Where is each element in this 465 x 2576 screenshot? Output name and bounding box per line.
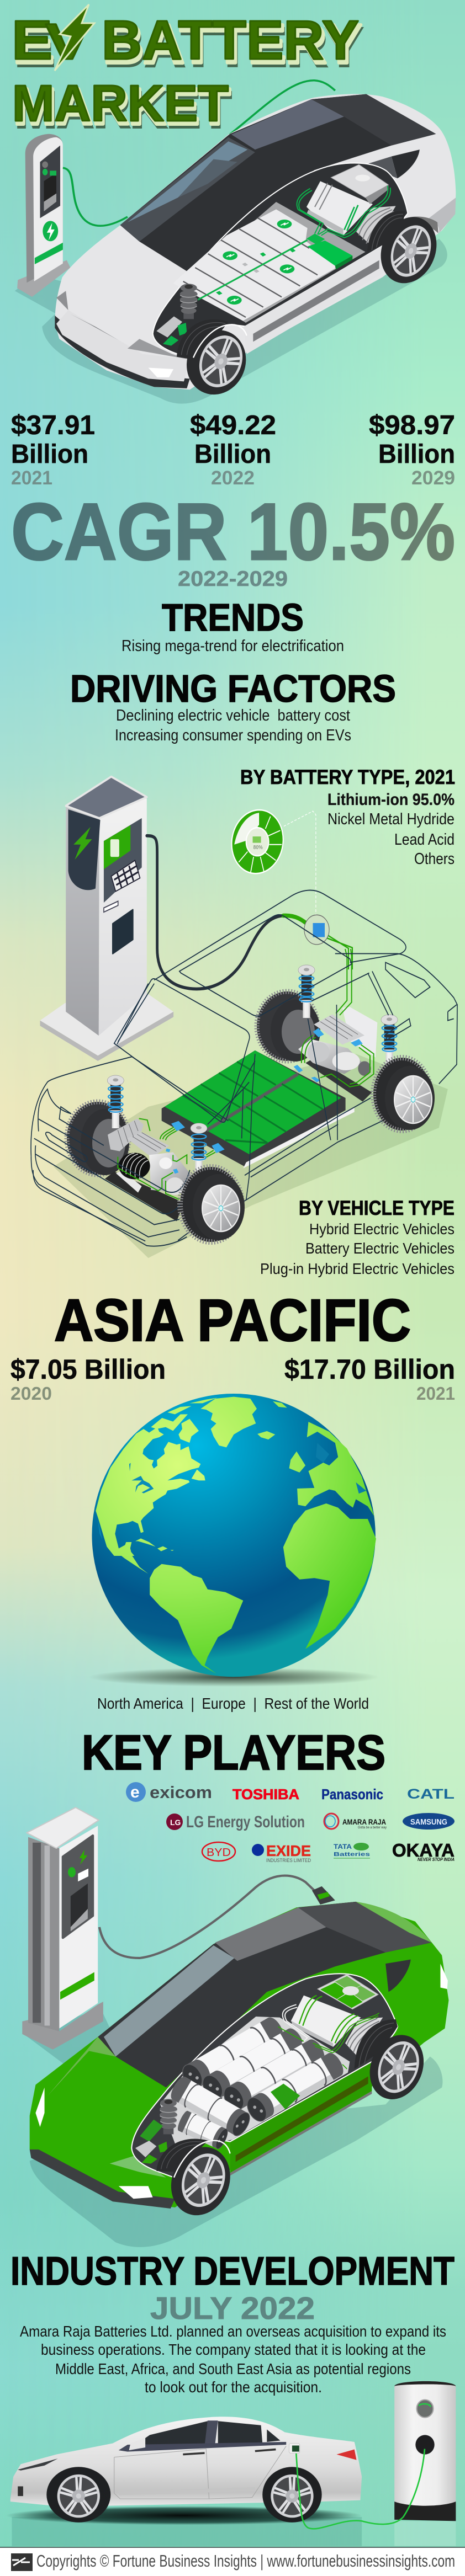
development body text <box>20 2323 446 2396</box>
regional heading: Asia Pacific: ASIA PACIFIC <box>54 1287 411 1353</box>
logo: Amara Raja <box>324 1814 387 1830</box>
title shadow and extrusion layers: BATTERY <box>104 17 363 78</box>
Asia Pacific 2020 value: 2020 <box>10 1383 52 1404</box>
globe inland seas <box>316 1443 366 1494</box>
2021 value <box>11 410 95 489</box>
logo: exicom: e <box>130 1783 140 1801</box>
charge state dial with callout line <box>222 799 316 920</box>
car 1 rear panels <box>365 150 456 239</box>
logo: Exide <box>252 1842 311 1863</box>
front wheel <box>156 2138 240 2224</box>
2022 value <box>190 410 276 489</box>
cutaway opening <box>153 163 408 358</box>
car 4: silver sedan charging at cylinder station <box>6 2381 456 2546</box>
wheel: near rear <box>373 1058 435 1130</box>
charge port <box>304 915 329 945</box>
trends text: Rising mega-trend for electrification <box>121 637 344 655</box>
footer logo <box>11 2553 33 2571</box>
title front letters <box>12 9 359 132</box>
sill <box>230 2062 372 2175</box>
logo: LG Energy Solution <box>166 1813 305 1831</box>
globe shadow <box>88 1667 379 1687</box>
driving factors text <box>115 707 351 744</box>
charge cable and wire outline <box>31 836 457 1246</box>
front wheel and tyre <box>177 319 256 403</box>
green battery tray <box>162 1050 355 1169</box>
footer bar <box>0 2547 465 2576</box>
globe body and eastern land <box>88 1394 379 1687</box>
far front wheel <box>67 1102 129 1175</box>
logo: Samsung: SAMSUNG <box>410 1817 447 1827</box>
title front letters: BATTERY <box>102 9 359 71</box>
title shadow and extrusion layers <box>14 17 363 138</box>
driving factors text: Increasing consumer spending on EVs <box>115 727 351 744</box>
battery tray walls <box>183 202 366 323</box>
electric motor <box>307 164 405 252</box>
logo: LG Energy Solution: LG <box>170 1818 181 1827</box>
wireframe car outline <box>31 890 457 1246</box>
title front letters: MARKET <box>12 74 229 132</box>
sedan wheel: rear <box>262 2467 322 2522</box>
sedan wheel: front <box>46 2467 110 2522</box>
logo: CATL: CATL <box>407 1786 455 1802</box>
green cell band <box>271 2084 300 2109</box>
rear wheel arch and tyre <box>371 209 446 292</box>
wheel: near front <box>180 1167 245 1242</box>
battery type segment <box>240 766 455 868</box>
car 1 cutaway interior <box>153 163 446 403</box>
car 3 ground shadow <box>24 2009 443 2247</box>
market size figures <box>11 410 455 489</box>
Asia Pacific 2021 value <box>284 1354 455 1404</box>
car 3 trim <box>30 1964 448 2209</box>
charger reflection <box>394 2521 456 2546</box>
land: north america and greenland <box>96 1397 257 1556</box>
sill panels <box>244 246 385 354</box>
Asia Pacific 2021 value: $17.70 Billion <box>284 1354 455 1385</box>
logo: exicom: exicom <box>150 1783 212 1802</box>
car 3 exterior <box>22 1807 448 2247</box>
logo: BYD <box>202 1842 235 1861</box>
logo: Amara Raja: AMARA RAJA <box>342 1817 386 1826</box>
2029 value: $98.97 <box>369 410 455 440</box>
green cables on motor <box>297 186 390 238</box>
green feed line to rear motor <box>326 934 352 969</box>
2021 value: Billion <box>11 440 88 469</box>
logo: Tata Green Batteries: TATA <box>334 1843 352 1850</box>
key players heading: KEY PLAYERS <box>82 1725 385 1780</box>
cell tray <box>160 2017 350 2148</box>
sedan reflection <box>12 2517 362 2546</box>
development body text: to look out for the acquisition. <box>145 2378 322 2396</box>
front suspension strut <box>180 284 198 319</box>
cylinder charger <box>394 2381 456 2521</box>
charger station 1 <box>17 134 70 297</box>
title shadow and extrusion layers: MARKET <box>15 81 231 138</box>
charger station 2 <box>40 777 173 1061</box>
electric motor with green lid <box>278 1974 398 2069</box>
sedan charge port <box>289 2443 300 2454</box>
logo: BYD: BYD <box>207 1847 231 1859</box>
2029 value <box>369 410 455 489</box>
front strut <box>160 2099 177 2134</box>
logo: Amara Raja: Gotta be a better way <box>358 1826 387 1830</box>
sedan lights <box>18 2450 356 2496</box>
charge state dial with callout line: 80% <box>253 844 263 850</box>
car 3 body <box>30 1902 448 2207</box>
Asia Pacific 2020 value <box>10 1354 166 1404</box>
car 1 exterior <box>15 81 456 404</box>
Asia Pacific 2020 value: $7.05 Billion <box>10 1354 166 1385</box>
company logos <box>126 1782 455 1863</box>
platform base elements <box>40 777 448 1258</box>
driving factors heading: DRIVING FACTORS <box>70 667 396 710</box>
battery type segment: Others <box>414 850 455 868</box>
Asia Pacific 2021 value: 2021 <box>416 1383 455 1404</box>
logo: Tata Green Batteries <box>334 1843 371 1858</box>
title shadow and extrusion layers: E <box>14 17 55 78</box>
icon: title lightning bolt <box>55 4 94 71</box>
regions list: North America | Europe | Rest of the World <box>97 1695 369 1712</box>
development date: JULY 2022 <box>150 2291 315 2326</box>
battery type segment: Lead Acid <box>394 831 455 849</box>
car 1: white EV with battery cutaway and charger <box>15 81 456 404</box>
great lakes <box>98 1463 154 1539</box>
cutaway opening <box>131 1974 398 2178</box>
charging cables, green <box>63 81 335 226</box>
car 3 roof and windshield <box>47 1902 431 2096</box>
title: EV battery market: E <box>13 13 54 75</box>
sedan door lines and handles <box>114 2446 286 2499</box>
vehicle type segment <box>260 1197 455 1277</box>
2022 value: Billion <box>194 440 271 469</box>
rear springs <box>298 965 398 1068</box>
front springs <box>107 1075 207 1176</box>
green junction box <box>307 233 352 269</box>
sedan windows <box>119 2420 286 2452</box>
title front letters: E <box>12 9 52 71</box>
cell rows <box>168 2014 347 2151</box>
front compartment parts <box>156 316 187 346</box>
logo: Exide: INDUSTRIES LIMITED <box>266 1858 311 1863</box>
logo: Okaya: NEVER STOP INDIA <box>418 1857 455 1862</box>
car 1 ground shadow <box>15 239 447 404</box>
driving factors text: Declining electric vehicle battery cost <box>116 707 350 724</box>
car 2: wireframe EV platform with charger <box>31 777 457 1258</box>
title: EV battery market: BATTERY <box>103 13 362 75</box>
sedan ground shadow <box>6 2506 362 2525</box>
2029 value: Billion <box>378 440 455 469</box>
charging cable, black and green <box>147 836 311 989</box>
2022 value: 2022 <box>211 467 255 489</box>
2021 value: $37.91 <box>11 410 95 440</box>
logo: LG Energy Solution: LG Energy Solution <box>186 1813 305 1831</box>
battery cells <box>173 209 335 321</box>
title front letters: V <box>45 14 89 70</box>
battery type segment: Lithium-ion 95.0% <box>327 791 455 809</box>
land masses: central and south america, africa, europe <box>115 1401 376 1674</box>
car 1 body <box>55 94 456 390</box>
2029 value: 2029 <box>411 467 455 489</box>
logo: exicom <box>126 1782 212 1802</box>
logo: Samsung <box>403 1813 455 1830</box>
ground shadow <box>54 1054 448 1258</box>
car 3: green EV with cylindrical cells and charger <box>22 1807 448 2247</box>
rear wheel <box>361 2027 433 2108</box>
globe illustration <box>88 1394 379 1687</box>
logo: Exide: EXIDE <box>266 1842 311 1859</box>
2022 value: $49.22 <box>190 410 276 440</box>
charger station 3 <box>22 1807 103 2050</box>
charging cable, bright green <box>296 2449 425 2529</box>
CAGR period: 2022-2029 <box>178 567 288 591</box>
logo: Okaya: OKAYA <box>392 1840 455 1860</box>
title: EV battery market: MARKET <box>14 78 230 135</box>
logo: Tata Green Batteries: Batteries <box>334 1852 371 1858</box>
sedan body <box>10 2417 362 2506</box>
car 3 cutaway interior <box>131 1974 433 2224</box>
logo: Toshiba: TOSHIBA <box>232 1786 299 1802</box>
logo: Panasonic: Panasonic <box>321 1786 383 1802</box>
title: EV battery market <box>12 4 363 138</box>
trends heading: TRENDS <box>162 596 304 639</box>
car 1 bumper <box>55 291 190 388</box>
charging cable, gray <box>99 1876 335 1958</box>
rear motor assembly <box>294 949 398 1102</box>
car 1 roof and windshield <box>120 94 436 273</box>
development body text: Middle East, Africa, and South East Asia as potential regions <box>55 2360 411 2377</box>
front motor assembly <box>105 1075 225 1221</box>
globe ocean <box>92 1394 376 1677</box>
2021 value: 2021 <box>11 467 52 489</box>
front compartment parts <box>135 2120 167 2164</box>
far rear wheel <box>257 991 320 1062</box>
